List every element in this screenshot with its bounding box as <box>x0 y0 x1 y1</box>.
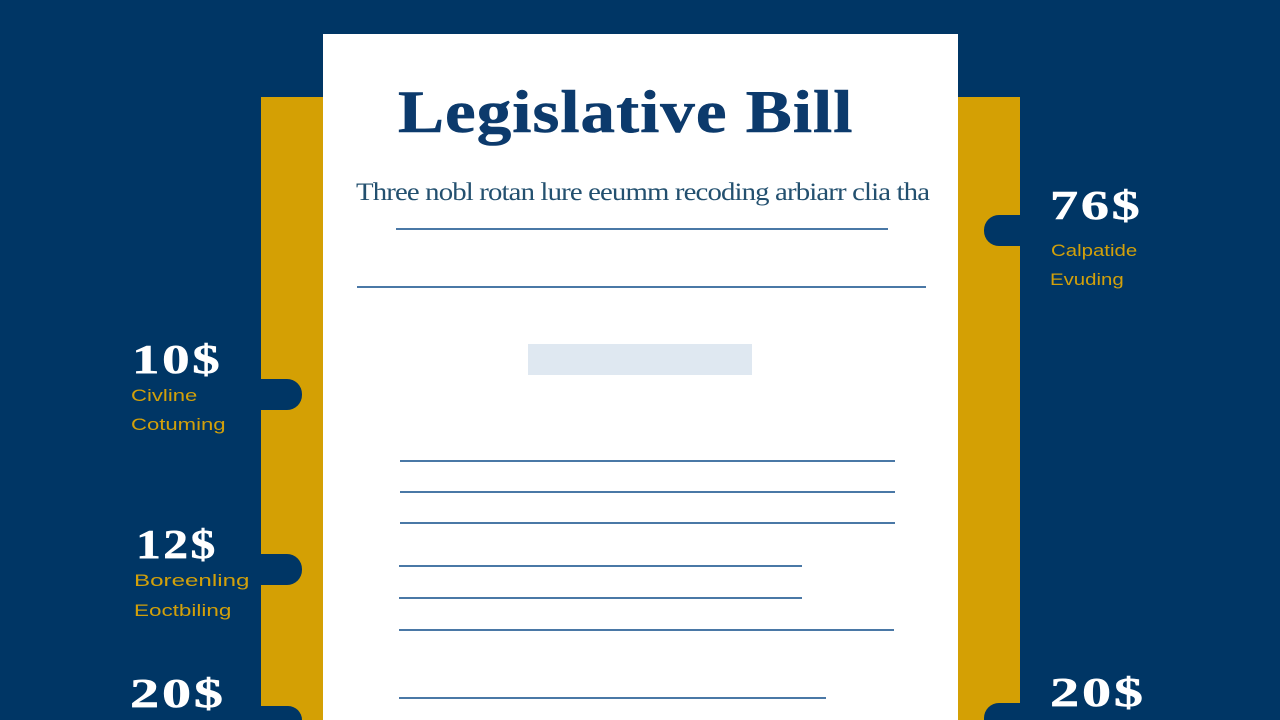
stat: 12%: 12$ <box>136 521 218 567</box>
stat: 10% <box>131 336 226 434</box>
stat: left 20%: 20$ <box>130 670 226 716</box>
highlighted block <box>528 344 752 375</box>
document page <box>323 34 958 720</box>
tab: left 12% <box>261 554 302 585</box>
stat: 12%: Boreenling <box>134 571 249 590</box>
tab: left 20% <box>261 706 302 720</box>
stat: 76%: Evuding <box>1050 270 1124 289</box>
left gold band <box>261 97 323 720</box>
stat: right 20%: 20$ <box>1050 669 1146 715</box>
subtitle: Three nobl rotan lure eeumm recoding arbiarr clia tha <box>356 179 929 206</box>
rule <box>357 286 926 288</box>
stat: 76%: 76$ <box>1050 182 1142 228</box>
tab: left 10% <box>261 379 302 410</box>
tab: right 76% <box>984 215 1020 246</box>
rule <box>396 228 888 230</box>
stat: 10%: Civline <box>131 386 197 405</box>
stat: 12% <box>134 521 249 620</box>
stat: 76% <box>1050 182 1142 289</box>
stat: 10%: Cotuming <box>131 415 226 434</box>
right gold band <box>958 97 1020 720</box>
title: Legislative Bill <box>398 79 853 145</box>
stat: 76%: Calpatide <box>1051 241 1137 260</box>
stat: 12%: Eoctbiling <box>134 601 231 620</box>
stat: 10%: 10$ <box>132 336 222 382</box>
tab: right 20% <box>984 703 1020 720</box>
text lines <box>399 460 895 699</box>
